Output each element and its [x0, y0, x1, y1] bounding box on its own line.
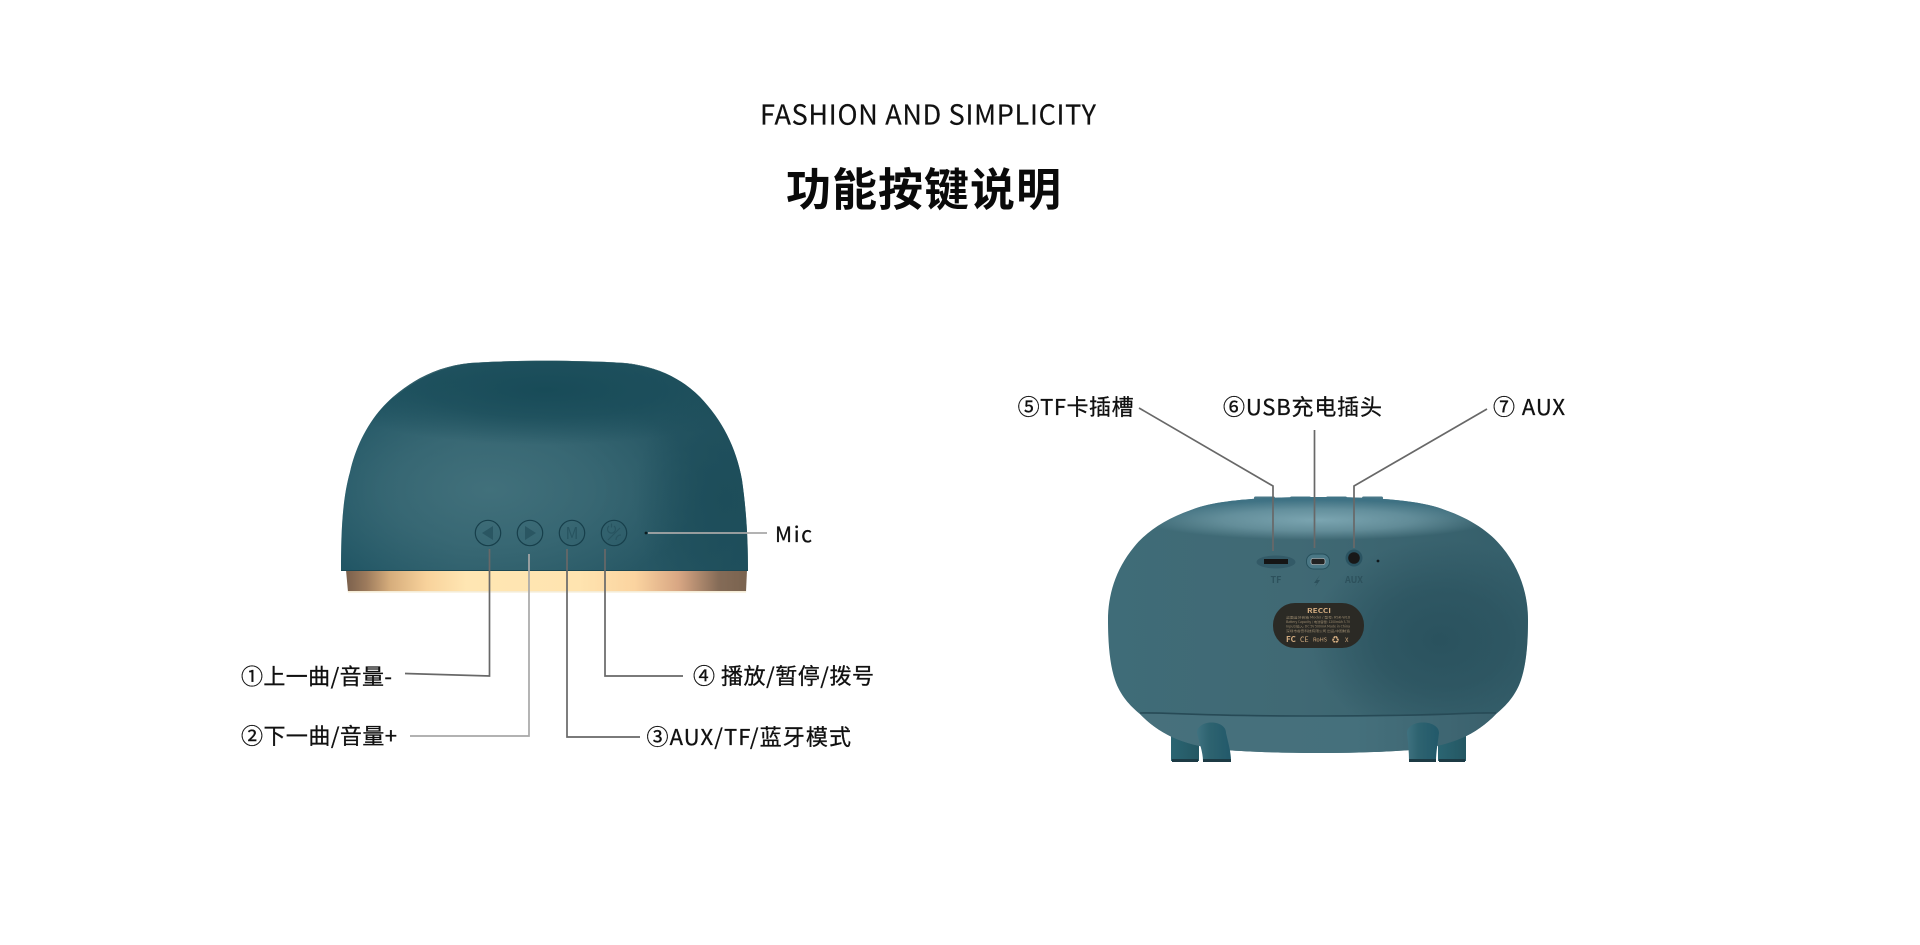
port: usb: [1306, 554, 1330, 569]
panel: front view speaker: [341, 360, 748, 592]
leader line: button 4: [605, 549, 683, 676]
product rating plate: Input/输入: DC 5V 500mA Made in China: [1286, 624, 1350, 628]
leader line: mic: [648, 532, 767, 534]
speaker body: [1108, 497, 1528, 753]
product rating plate: CE: [1300, 635, 1309, 645]
button: previous: [475, 520, 501, 546]
label: tf slot: ⑤TF卡插槽: [1018, 390, 1134, 422]
port label: aux: AUX: [1344, 573, 1363, 586]
rear feet: [1171, 730, 1466, 762]
label: button 4: ④ 播放/暂停/拨号: [693, 659, 874, 691]
indicator dot: [1377, 560, 1379, 562]
product rating plate: Battery Capacity / 电池容量: 1200mAh 3.7V: [1286, 619, 1350, 624]
mic hole: [645, 532, 647, 534]
port label: tf: TF: [1271, 573, 1281, 586]
speaker dome body: [341, 360, 748, 571]
leader line: button 1: [405, 549, 490, 676]
button: mode: M: [566, 520, 578, 544]
product rating plate: 桌面蓝牙音箱 Model / 型号: RSK-W18: [1286, 614, 1350, 620]
label: button 2: ②下一曲/音量+: [241, 719, 397, 751]
button: mode: [559, 520, 585, 546]
button: next: [517, 520, 543, 546]
product rating plate: X: [1345, 635, 1349, 644]
icon: charging bolt: [1314, 575, 1320, 587]
label: aux: ⑦ AUX: [1493, 390, 1565, 422]
label: mic: Mic: [775, 519, 812, 549]
label: button 3: ③AUX/TF/蓝牙模式: [646, 720, 851, 752]
port: aux jack: [1346, 550, 1362, 566]
button: play and phone: [601, 520, 627, 546]
front feet: [1197, 722, 1439, 762]
panel: back view speaker: [1108, 496, 1528, 762]
product rating plate: [1273, 603, 1364, 648]
port: tf slot: [1256, 556, 1296, 568]
title: english subtitle: FASHION AND SIMPLICITY: [760, 94, 1097, 132]
product rating plate: ♻: [1332, 635, 1339, 645]
leader line: aux: [1354, 409, 1487, 548]
lower skirt: [1138, 713, 1498, 753]
leader line: tf slot: [1139, 408, 1273, 551]
product rating plate: RoHS: [1313, 636, 1328, 644]
title: chinese heading: 功能按键说明: [786, 154, 1061, 218]
product rating plate: FC: [1286, 634, 1297, 645]
product rating plate: 深圳市睿奇科技有限公司 出品 中国制造: [1286, 628, 1350, 633]
label: button 1: ①上一曲/音量-: [241, 660, 392, 692]
label: usb: ⑥USB充电插头: [1223, 390, 1382, 422]
top tabs: [1254, 496, 1383, 500]
product rating plate: RECCI: [1307, 605, 1331, 615]
leader line: button 3: [567, 549, 640, 737]
leader line: button 2: [410, 554, 529, 736]
leader line: usb: [1314, 430, 1316, 548]
gold base band: [346, 570, 747, 593]
